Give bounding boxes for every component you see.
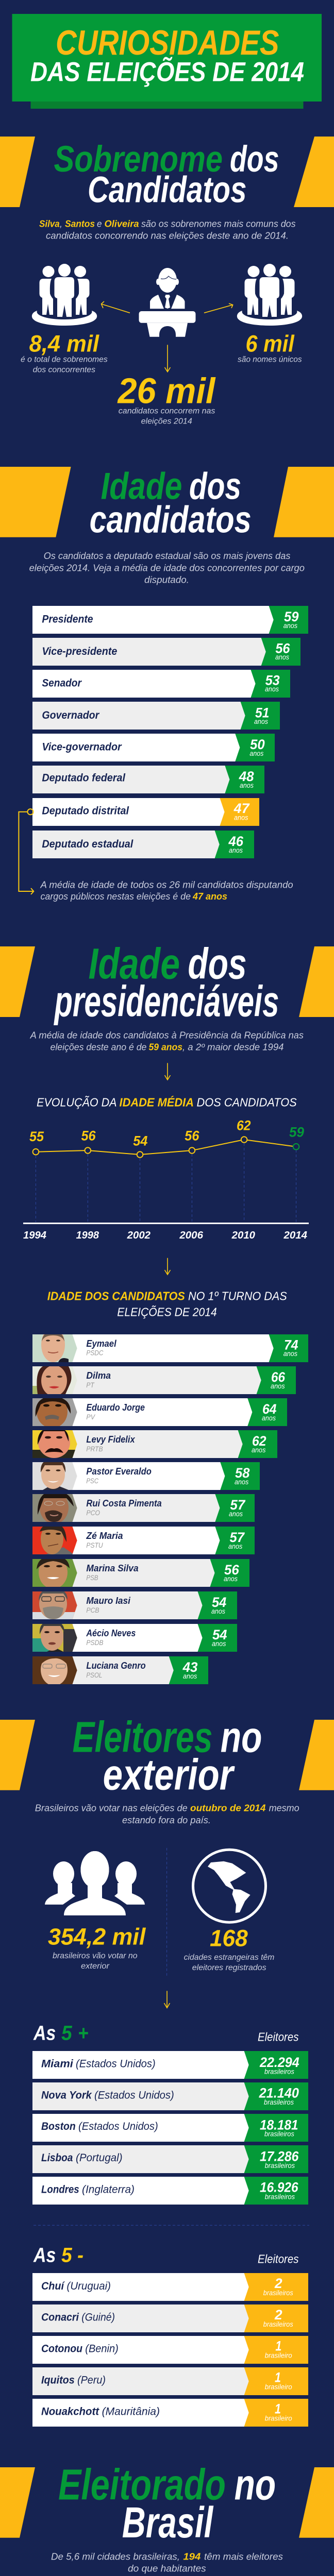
candidate: Zé Maria: Zé Maria [86,1530,123,1541]
section heading: eleitorado no brasil: no [235,2461,276,2509]
title banner: CURIOSIDADES [56,23,279,62]
candidate: Pastor Everaldo: anos [235,1478,249,1486]
intro text: sobrenomes [39,219,296,241]
stat: 354,2 mil: exterior [81,1962,110,1971]
intro text: eleitorado: do que habitantes [128,2564,206,2574]
note: média de idade: 47 anos [192,891,227,902]
row: Londres: Londres [41,2184,79,2196]
stat: 6 mil: são nomes únicos [238,355,302,364]
heading: as 5 menos: 5 [61,2244,72,2267]
candidate: Dilma: anos [271,1382,285,1390]
row: Lisboa: brasileiros [265,2161,295,2170]
intro text: sobrenomes: candidatos concorrendo nas eleições deste ano de 2014. [46,230,289,241]
bar: senador: Senador [42,677,82,689]
line chart: idade média 1994-2014: 2014 [283,1230,307,1241]
intro text: presidenciáveis: A média de idade dos candidatos à Presidência da República nas [30,1030,304,1041]
candidate: Levy Fidelix: anos [252,1446,266,1454]
candidate: Eduardo Jorge [32,1398,287,1426]
bar: governador [32,702,280,730]
bar: vice-governador: anos [249,750,264,757]
row: Boston [32,2114,308,2142]
row: Boston: 18.181 [260,2117,298,2132]
row: Nouakchott: 1 [275,2401,281,2416]
photo: Marina Silva [32,1559,77,1587]
section heading: eleitorado no brasil: Brasil [122,2498,214,2547]
candidate: Pastor Everaldo: 58 [235,1465,249,1481]
heading: as 5 menos [33,2244,299,2267]
heading: as 5 mais: 5 [61,2022,72,2044]
intro text: eleitorado [51,2551,283,2574]
candidate: Rui Costa Pimenta: Rui Costa Pimenta [86,1498,162,1509]
section heading: eleitores no exterior: Eleitores [72,1713,212,1761]
photo: Dilma [32,1366,77,1394]
intro text: idade por cargo: eleições 2014. Veja a média de idade dos concorrentes por cargo [29,563,305,573]
section heading: eleitores no exterior: exterior [103,1750,235,1799]
intro text: eleitores no exterior: Brasileiros vão votar nas eleições de [35,1803,188,1814]
row: Nouakchott: brasileiro [265,2414,292,2422]
arrow: to evolution chart [165,1063,170,1080]
row: Miami [32,2051,308,2079]
stat: 354,2 mil: brasileiros vão votar no [53,1952,138,1960]
row: Iquitos: brasileiro [265,2383,292,2391]
row: Iquitos: Iquitos [41,2375,75,2386]
photo: Levy Fidelix [32,1430,77,1458]
stat: 168: eleitores registrados [192,1963,266,1972]
bar: vice-governador [32,734,275,761]
line chart: idade média 1994-2014: 62 [237,1117,250,1133]
stat: 26 mil: candidatos concorrem nas [119,407,215,416]
row: Miami: (Estados Unidos) [76,2058,156,2070]
arrow: podium to candidates [165,345,170,372]
row: Chuí [32,2273,308,2301]
section heading: idade dos presidenciáveis [0,939,334,1026]
heading: as 5 mais: + [78,2022,89,2044]
candidate: Marina Silva: 56 [224,1562,240,1578]
candidate: Pastor Everaldo: PSC [86,1477,98,1485]
chart heading: evolução da idade média: IDADE MÉDIA [120,1095,194,1109]
row: Iquitos: (Peru) [77,2375,106,2386]
photo: Pastor Everaldo [32,1462,77,1490]
section heading: eleitores no exterior [0,1713,334,1799]
row: Nouakchott [32,2399,308,2427]
row: Cotonou: (Benin) [85,2343,119,2355]
row: Chuí: Chuí [41,2280,65,2292]
intro text: idade por cargo: disputado. [144,575,189,585]
bar: deputado estadual: anos [229,846,243,854]
row: Nova York: (Estados Unidos) [94,2089,174,2101]
row: Miami: 22.294 [259,2055,299,2070]
section heading: eleitores no exterior: no [221,1713,262,1761]
row: Chuí: (Uruguai) [66,2280,111,2292]
line chart: idade média 1994-2014: 1998 [76,1230,99,1241]
candidate: Eduardo Jorge: 64 [262,1401,276,1417]
candidate: Mauro Iasi: 54 [212,1595,226,1610]
intro text: eleitores no exterior: outubro de 2014 [190,1803,265,1814]
title banner [12,14,322,109]
intro text: sobrenomes: Silva [39,219,60,229]
line chart: idade média 1994-2014: 56 [81,1128,96,1143]
section heading: sobrenome dos candidatos [0,137,334,211]
candidate: Luciana Genro [32,1656,208,1684]
intro text: idade por cargo: Os candidatos a deputado estadual são os mais jovens das [44,551,290,561]
candidate: Aécio Neves: anos [212,1640,226,1648]
row: Lisboa [32,2145,308,2173]
row: Conacri: 2 [274,2307,282,2323]
intro text: eleitores no exterior [35,1803,299,1825]
candidate: Luciana Genro: PSOL [86,1671,102,1679]
intro text: eleitores no exterior: estando fora do país. [122,1815,211,1825]
row: Cotonou [32,2336,308,2364]
candidate: Dilma: PT [86,1381,95,1389]
row: Londres: (Inglaterra) [82,2184,135,2196]
stat: 8,4 mil: é o total de sobrenomes [21,355,108,364]
candidate: Aécio Neves: PSDB [86,1639,103,1647]
candidate: Luciana Genro: Luciana Genro [86,1660,146,1671]
stat: 8,4 mil: 8,4 mil [29,331,99,357]
candidate: Eymael: 74 [284,1337,298,1352]
candidate: Rui Costa Pimenta: PCO [86,1509,100,1517]
section heading: eleitorado no brasil [0,2461,334,2547]
intro text: sobrenomes: Oliveira [104,219,139,229]
row: Nova York: brasileiros [264,2098,294,2106]
chart heading: evolução da idade média: DOS CANDIDATOS [197,1095,297,1109]
stat: 6 mil [238,331,302,364]
intro text: idade por cargo [29,551,305,585]
stat: 8,4 mil [21,331,108,375]
bar chart: idade por cargo [32,606,308,858]
list heading: idade dos candidatos: IDADE DOS CANDIDATOS [47,1289,185,1302]
candidate: Luciana Genro: 43 [182,1659,198,1675]
row: Londres: brasileiros [265,2192,295,2200]
row: Nova York: Nova York [41,2089,92,2101]
intro text: sobrenomes: , [60,219,62,229]
candidate: Mauro Iasi: anos [211,1607,225,1615]
bar: deputado federal [32,766,264,793]
candidate: Eduardo Jorge: Eduardo Jorge [86,1402,145,1413]
bar: presidente [32,606,308,634]
stat: 354,2 mil [48,1923,146,1971]
row: Londres: 16.926 [260,2179,298,2195]
row: Cotonou: 1 [275,2338,281,2353]
row: Nouakchott: Nouakchott [41,2406,99,2418]
candidate: Marina Silva: Marina Silva [86,1563,139,1573]
bar: vice-presidente [32,638,300,666]
candidate: Dilma: Dilma [86,1370,111,1381]
photo: Eduardo Jorge [32,1398,77,1426]
bar: deputado federal: Deputado federal [42,772,126,784]
heading: as 5 menos: As [33,2244,56,2267]
list heading: idade dos candidatos: NO 1º TURNO DAS [188,1289,287,1302]
intro text: eleitores no exterior: mesmo [269,1803,299,1814]
intro text: eleitorado: De 5,6 mil cidades brasileiras, [51,2551,180,2562]
bar: deputado distrital [32,798,259,826]
candidate: Mauro Iasi: PCB [86,1606,99,1614]
candidate: Levy Fidelix: Levy Fidelix [86,1434,135,1445]
photo: Rui Costa Pimenta [32,1494,77,1522]
row: Lisboa: (Portugal) [76,2152,123,2164]
row: Conacri: brasileiros [263,2320,293,2328]
bar: deputado estadual [32,831,254,858]
divider between stats [166,1848,168,1977]
candidate: Marina Silva: PSB [86,1574,98,1582]
heading: as 5 mais: Eleitores [258,2030,299,2044]
stat: 8,4 mil: dos concorrentes [33,366,95,375]
section heading: eleitorado no brasil: Eleitorado [58,2461,226,2509]
row: Lisboa: Lisboa [41,2152,73,2164]
row: Conacri: (Guiné) [81,2312,115,2324]
candidate: Zé Maria: PSTU [86,1541,103,1549]
stat: 26 mil: eleições 2014 [141,417,192,426]
line chart: idade média 1994-2014 [23,1117,309,1241]
list heading: idade dos candidatos [47,1289,287,1318]
arrow: podium to unique names [204,303,233,313]
section heading: idade dos candidatos [0,465,334,540]
icon: candidate at podium [139,268,196,337]
line chart: idade média 1994-2014: 54 [133,1133,147,1148]
row: Miami: Miami [41,2058,74,2070]
arrow: to city rankings [164,1991,170,2008]
photo: Mauro Iasi [32,1591,77,1619]
bar: senador: anos [265,685,279,693]
bar: deputado estadual: 46 [228,834,244,849]
intro text: eleitorado: têm mais eleitores [204,2551,283,2562]
bar: deputado distrital: anos [234,814,248,822]
candidate: Eduardo Jorge: anos [262,1414,276,1422]
intro text: presidenciáveis: 59 anos [148,1042,182,1052]
row: Cotonou: brasileiro [265,2351,292,2360]
row: Londres [32,2177,308,2205]
candidate: Aécio Neves: 54 [212,1627,227,1642]
intro text: presidenciáveis: eleições deste ano é de [51,1042,146,1052]
stat: 168: cidades estrangeiras têm [184,1953,274,1962]
row: Nouakchott: (Mauritânia) [102,2406,160,2418]
bar: senador [32,670,290,698]
line chart: idade média 1994-2014: 2010 [231,1230,255,1241]
bar: presidente: anos [283,622,297,630]
line chart: idade média 1994-2014: 56 [185,1128,199,1143]
bar: governador: Governador [42,709,100,721]
row: Chuí: 2 [274,2276,282,2291]
heading: as 5 mais: As [33,2022,56,2044]
candidate: Aécio Neves: Aécio Neves [86,1628,136,1638]
candidate: Dilma: 66 [271,1369,286,1385]
stat: 354,2 mil: 354,2 mil [48,1923,146,1950]
row: Iquitos [32,2367,308,2395]
line chart: idade média 1994-2014: 1994 [23,1230,46,1241]
candidate: Eymael: anos [283,1350,297,1358]
candidate: Luciana Genro: anos [183,1672,197,1680]
line chart: idade média 1994-2014: 59 [289,1125,304,1140]
row: Conacri: Conacri [41,2312,79,2324]
intro text: sobrenomes: e [97,219,102,229]
candidate: Levy Fidelix: 62 [252,1433,266,1449]
stat: 168: 168 [210,1925,248,1952]
bar: presidente: Presidente [42,613,93,625]
row: Nova York: 21.140 [259,2086,299,2101]
bar: deputado estadual: Deputado estadual [42,838,133,850]
photo: Eymael [32,1334,77,1362]
arrow: to candidates list [165,1258,170,1275]
chart heading: evolução da idade média: EVOLUÇÃO DA [37,1095,116,1109]
bar: deputado federal: anos [240,782,254,789]
bar: vice-presidente: 56 [275,640,290,656]
note: média de idade [40,879,293,902]
table: cidades com mais eleitores [32,2051,308,2205]
bar: deputado distrital: Deputado distrital [42,805,129,817]
heading: as 5 menos: Eleitores [258,2252,299,2266]
photo: Zé Maria [32,1527,77,1554]
bar: senador: 53 [265,672,280,688]
row: Cotonou: Cotonou [41,2343,82,2355]
line chart: idade média 1994-2014: 2002 [127,1230,151,1241]
chart heading: evolução da idade média [37,1095,297,1109]
candidate: Rui Costa Pimenta: anos [229,1510,243,1518]
bar: presidente: 59 [284,609,298,624]
icon: group of people right [237,264,302,326]
stat: 26 mil: 26 mil [117,371,216,411]
bar: vice-governador: Vice-governador [42,741,122,753]
candidate: Mauro Iasi: Mauro Iasi [86,1595,131,1606]
section heading: idade dos candidatos: Idade [101,465,182,507]
candidate bars [32,1327,308,1686]
section heading: sobrenome dos candidatos: dos [230,139,279,180]
row: Boston: (Estados Unidos) [78,2121,158,2132]
photo: Aécio Neves [32,1624,77,1652]
candidate: Levy Fidelix: PRTB [86,1445,103,1453]
candidate: Eymael [32,1334,308,1362]
candidate: Mauro Iasi [32,1588,237,1619]
candidate: Eymael: Eymael [86,1338,116,1349]
intro text: sobrenomes: Santos [65,219,95,229]
row: Boston: brasileiros [264,2130,294,2138]
intro text: sobrenomes: são os sobrenomes mais comuns dos [141,219,296,229]
list heading: idade dos candidatos: ELEIÇÕES DE 2014 [117,1304,217,1318]
row: Conacri [32,2304,308,2332]
bar: deputado distrital: 47 [233,801,250,816]
candidate: Pastor Everaldo: Pastor Everaldo [86,1466,152,1477]
heading: as 5 menos: - [77,2244,84,2267]
row: Iquitos: 1 [275,2369,281,2385]
section heading: idade dos presidenciáveis: dos [188,939,247,988]
stat: 6 mil: 6 mil [245,331,295,357]
candidate: Aécio Neves [32,1621,237,1652]
line chart: idade média 1994-2014: 2006 [179,1230,204,1241]
section heading: idade dos presidenciáveis: Idade [89,939,180,988]
icon: voters busts [45,1851,145,1916]
candidate: Pastor Everaldo [32,1462,260,1490]
row: Lisboa: 17.286 [260,2148,299,2164]
arrow: podium to surnames [101,301,130,313]
candidate: Levy Fidelix [32,1427,277,1458]
candidate: Zé Maria [32,1527,255,1554]
candidate: Marina Silva [32,1559,249,1587]
section heading: idade dos candidatos: candidatos [90,499,252,540]
table: cidades com menos eleitores [32,2273,308,2427]
candidate: Eymael: PSDC [86,1349,104,1357]
icon: group of people left [32,264,97,326]
heading: as 5 mais [33,2022,299,2044]
bar: deputado federal: 48 [239,769,254,784]
bar: vice-governador: 50 [250,737,265,752]
row: Boston: Boston [41,2121,76,2132]
row: Chuí: brasileiros [263,2289,293,2297]
candidate: Dilma [32,1366,296,1394]
note: média de idade: A média de idade de todos os 26 mil candidatos disputando [40,879,293,890]
photo: Luciana Genro [32,1656,77,1684]
row: Nova York [32,2082,308,2110]
stat: 168 [184,1925,274,1972]
candidate: Rui Costa Pimenta: 57 [230,1497,246,1513]
intro text: presidenciáveis [30,1030,304,1052]
section heading: sobrenome dos candidatos: Sobrenome [54,139,223,180]
bar: vice-presidente: Vice-presidente [42,646,118,657]
intro text: presidenciáveis: , a 2º maior desde 1994 [182,1042,283,1052]
candidate: Zé Maria: anos [228,1543,243,1550]
section heading: idade dos candidatos: dos [189,465,241,507]
candidate: Marina Silva: anos [224,1575,238,1583]
candidate: Rui Costa Pimenta [32,1494,255,1522]
bar: governador: anos [254,718,268,725]
bar: governador: 51 [255,705,269,721]
candidate: Zé Maria: 57 [230,1530,245,1545]
candidate: Eduardo Jorge: PV [86,1413,96,1421]
row: Miami: brasileiros [264,2067,294,2076]
intro text: eleitorado: 194 [183,2551,201,2562]
bar: vice-presidente: anos [275,653,289,661]
bracket arrow: deputado distrital to average note [19,806,34,894]
note: média de idade: cargos públicos nestas eleições é de [40,891,191,902]
icon: globe [193,1850,266,1922]
section heading: sobrenome dos candidatos: Candidatos [88,170,246,211]
line chart: idade média 1994-2014: 55 [29,1129,44,1144]
